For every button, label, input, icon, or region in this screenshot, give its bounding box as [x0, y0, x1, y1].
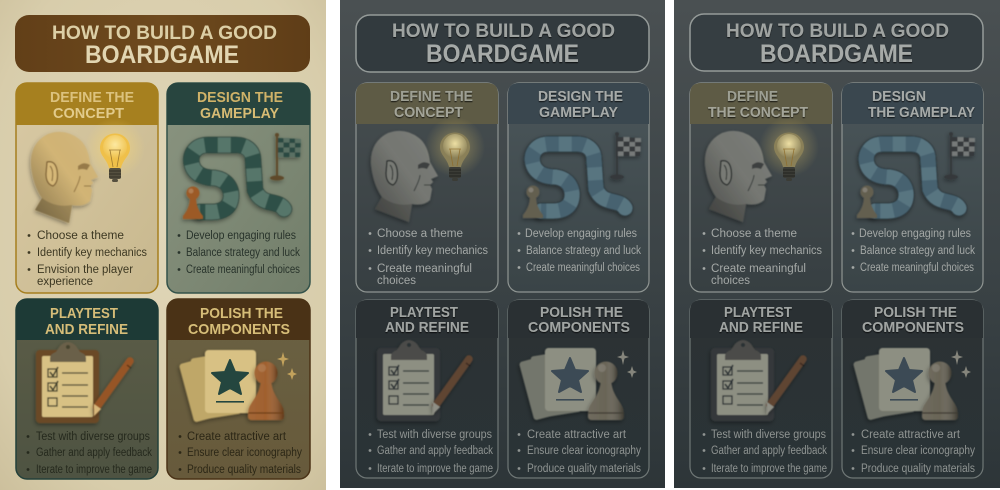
panel heading: playtest and refine: PLAYTEST	[50, 305, 118, 322]
bullet list: playtest: Iterate to improve the game	[377, 463, 493, 475]
icon: pencil	[767, 359, 804, 414]
bullet list: components: Produce quality materials	[187, 464, 301, 476]
bullet list: concept: Identify key mechanics	[37, 247, 147, 259]
panel heading: playtest and refine: AND REFINE	[385, 319, 469, 336]
title banner	[690, 14, 983, 71]
panel heading: playtest and refine	[16, 299, 158, 340]
icon: clipboard checklist	[36, 342, 99, 423]
bullet list: playtest: Iterate to improve the game	[711, 463, 827, 475]
bullet list: concept: Choose a theme	[711, 228, 797, 240]
icon: clipboard checklist	[711, 340, 774, 421]
icon: winding game track	[866, 144, 959, 211]
bullet list: gameplay: Create meaningful choices	[860, 262, 974, 274]
bullet list: concept	[369, 228, 488, 287]
panel heading: define the concept	[690, 83, 832, 124]
panel heading: design the gameplay: DESIGN THE	[197, 89, 283, 106]
bullet list: playtest: Test with diverse groups	[377, 429, 492, 441]
bullet list: gameplay: Develop engaging rules	[859, 228, 971, 240]
panel heading: polish the components: POLISH THE	[874, 304, 957, 321]
bullet list: playtest: Gather and apply feedback	[711, 445, 827, 457]
icon: pawn	[183, 186, 203, 219]
poster background	[0, 0, 326, 490]
bullet list: playtest: Gather and apply feedback	[36, 447, 152, 459]
panel heading: polish the components	[508, 300, 649, 338]
bullet list: playtest	[703, 429, 827, 475]
panel heading: define the concept: DEFINE THE	[50, 89, 134, 106]
bullet list: concept: Create meaningful	[711, 263, 806, 275]
panel heading: define the concept: DEFINE	[727, 88, 778, 105]
panel heading: design the gameplay: THE GAMEPLAY	[868, 104, 975, 121]
bullet list: concept: Create meaningful	[377, 263, 472, 275]
poster: slate version with revised headings	[674, 0, 1000, 488]
panel heading: define the concept: CONCEPT	[394, 104, 463, 121]
bullet list: components	[852, 429, 975, 475]
bullet list: components	[518, 429, 641, 475]
panel: define the concept	[16, 83, 158, 293]
panel heading: playtest and refine: AND REFINE	[45, 321, 128, 338]
icon: large pawn	[248, 362, 284, 420]
icon: fanned cards with star	[853, 348, 930, 420]
bullet list: gameplay: Balance strategy and luck	[860, 245, 975, 257]
panel: polish the components	[842, 300, 983, 478]
poster background	[340, 0, 665, 488]
title banner	[15, 15, 310, 72]
panel heading: design the gameplay	[167, 83, 310, 125]
panel: design the gameplay	[508, 83, 649, 292]
panel heading: polish the components: POLISH THE	[200, 305, 283, 322]
bullet list: concept: Choose a theme	[377, 228, 463, 240]
title banner: BOARDGAME	[760, 40, 913, 68]
icon: pencil	[94, 361, 131, 416]
poster background	[674, 0, 1000, 488]
bullet list: gameplay: Balance strategy and luck	[186, 247, 300, 259]
panel heading: polish the components: POLISH THE	[540, 304, 623, 321]
bullet list: concept	[28, 230, 147, 288]
bullet list: gameplay: Create meaningful choices	[526, 262, 640, 274]
bullet list: components: Ensure clear iconography	[861, 445, 975, 457]
icon: head	[371, 131, 438, 222]
bullet list: playtest: Gather and apply feedback	[377, 445, 493, 457]
panel heading: design the gameplay: DESIGN	[872, 88, 926, 105]
title banner	[356, 15, 649, 72]
icon: fanned cards with star	[179, 350, 256, 422]
panel heading: design the gameplay: GAMEPLAY	[539, 104, 618, 121]
panel heading: define the concept	[356, 83, 498, 124]
icon: winding game track	[532, 144, 625, 211]
bullet list: components: Create attractive art	[187, 431, 287, 443]
bullet list: concept: Identify key mechanics	[711, 245, 822, 257]
panel heading: design the gameplay: DESIGN THE	[538, 88, 623, 105]
bullet list: playtest	[369, 429, 493, 475]
icon: winding game track	[191, 145, 284, 212]
panel: playtest and refine	[356, 300, 498, 478]
panel heading: define the concept: THE CONCEPT	[708, 104, 808, 121]
icon: pencil	[433, 359, 470, 414]
icon: light bulb	[759, 117, 819, 181]
poster: slate version	[340, 0, 665, 488]
title banner: BOARDGAME	[426, 40, 579, 68]
icon: checkered flag	[610, 132, 641, 180]
icon: fanned cards with star	[519, 348, 596, 420]
bullet list: components: Ensure clear iconography	[527, 445, 641, 457]
panel heading: playtest and refine: PLAYTEST	[390, 304, 458, 321]
bullet list: components: Ensure clear iconography	[187, 447, 302, 459]
bullet list: gameplay	[518, 228, 641, 274]
panel heading: define the concept: CONCEPT	[53, 105, 124, 122]
bullet list: components: Produce quality materials	[527, 463, 641, 475]
icon: light bulb	[425, 117, 485, 181]
icon: sparkles	[277, 352, 297, 380]
title banner: HOW TO BUILD A GOOD	[392, 21, 615, 42]
icon: head	[31, 132, 98, 223]
panel heading: polish the components	[842, 300, 983, 338]
bullet list: concept: choices	[377, 275, 416, 287]
panel heading: playtest and refine: AND REFINE	[719, 319, 803, 336]
bullet list: concept: Envision the player	[37, 264, 133, 276]
icon: sparkles	[951, 350, 971, 378]
icon: light bulb	[85, 118, 145, 182]
icon: checkered flag	[944, 132, 975, 180]
bullet list: components: Create attractive art	[861, 429, 961, 441]
panel: playtest and refine	[690, 300, 832, 478]
bullet list: gameplay: Balance strategy and luck	[526, 245, 641, 257]
panel heading: polish the components: COMPONENTS	[188, 321, 290, 338]
bullet list: components: Create attractive art	[527, 429, 627, 441]
panel heading: define the concept: DEFINE THE	[390, 88, 473, 105]
bullet list: playtest: Test with diverse groups	[711, 429, 826, 441]
icon: pawn	[523, 186, 543, 218]
icon: large pawn	[922, 362, 958, 420]
icon: head	[705, 131, 772, 222]
panel: design the gameplay	[842, 83, 983, 292]
title banner: HOW TO BUILD A GOOD	[52, 23, 277, 44]
panel heading: design the gameplay	[508, 83, 649, 124]
bullet list: gameplay	[852, 228, 975, 274]
panel: design the gameplay	[167, 83, 310, 293]
panel heading: polish the components: COMPONENTS	[528, 319, 630, 336]
poster: warm parchment version	[0, 0, 326, 490]
panel heading: define the concept	[16, 83, 158, 125]
bullet list: concept	[703, 228, 822, 287]
bullet list: gameplay: Develop engaging rules	[525, 228, 637, 240]
icon: clipboard checklist	[377, 340, 440, 421]
bullet list: concept: Identify key mechanics	[377, 245, 488, 257]
bullet list: playtest: Iterate to improve the game	[36, 464, 152, 476]
panel: define the concept	[690, 83, 832, 292]
bullet list: concept: experience	[37, 276, 93, 288]
icon: checkered flag	[270, 133, 301, 180]
panel: polish the components	[167, 299, 310, 479]
bullet list: components: Produce quality materials	[861, 463, 975, 475]
panel heading: design the gameplay: GAMEPLAY	[200, 105, 279, 122]
icon: pawn	[857, 186, 877, 218]
title banner: BOARDGAME	[85, 41, 239, 69]
bullet list: concept: choices	[711, 275, 750, 287]
panel heading: playtest and refine: PLAYTEST	[724, 304, 792, 321]
panel: polish the components	[508, 300, 649, 478]
icon: sparkles	[617, 350, 637, 378]
bullet list: concept: Choose a theme	[37, 230, 124, 242]
panel: playtest and refine	[16, 299, 158, 479]
bullet list: gameplay	[178, 230, 300, 276]
bullet list: gameplay: Create meaningful choices	[186, 264, 300, 276]
bullet list: gameplay: Develop engaging rules	[186, 230, 296, 242]
bullet list: playtest	[27, 431, 152, 476]
panel heading: polish the components: COMPONENTS	[862, 319, 964, 336]
bullet list: components	[179, 431, 302, 476]
panel heading: design the gameplay	[842, 83, 983, 124]
bullet list: playtest: Test with diverse groups	[36, 431, 150, 443]
title banner: HOW TO BUILD A GOOD	[726, 21, 949, 42]
panel heading: playtest and refine	[690, 300, 832, 338]
panel: define the concept	[356, 83, 498, 292]
panel heading: playtest and refine	[356, 300, 498, 338]
panel heading: polish the components	[167, 299, 310, 340]
icon: large pawn	[588, 362, 624, 420]
